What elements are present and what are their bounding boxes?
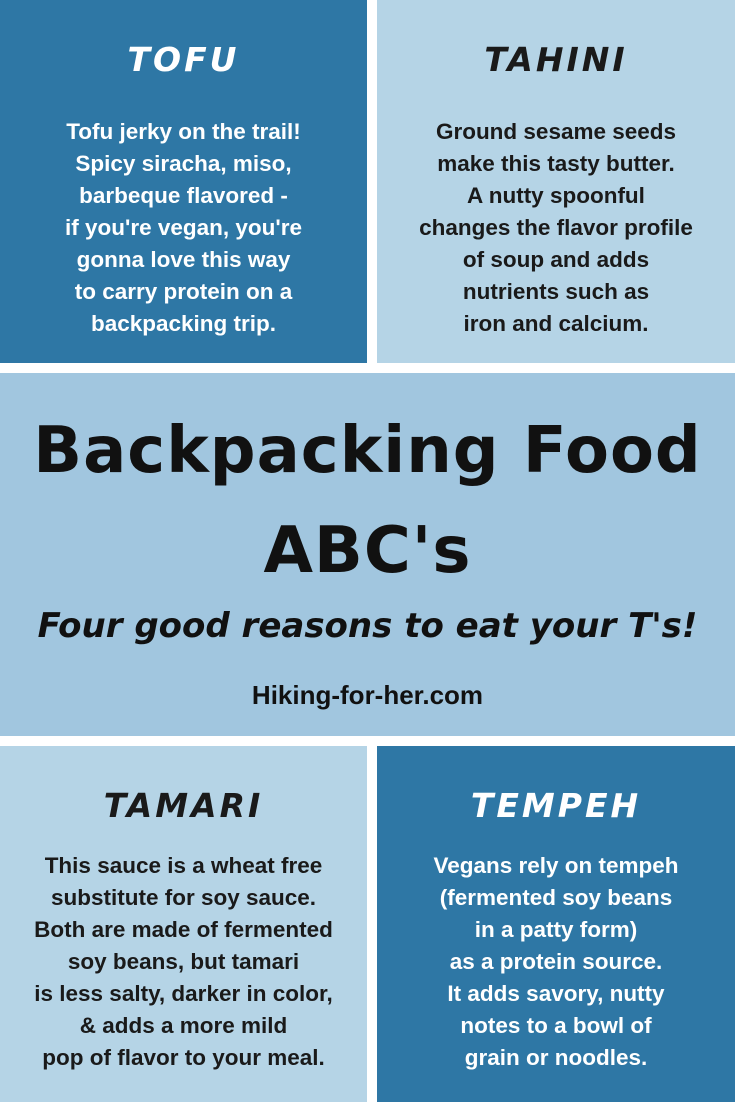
title	[33, 414, 702, 588]
text: tofu: to carry protein on a	[75, 279, 292, 304]
text: tempeh: (fermented soy beans	[440, 885, 672, 910]
panel: title band	[0, 373, 735, 736]
text: tempeh: in a patty form)	[475, 917, 637, 942]
text: tofu: Tofu jerky on the trail!	[66, 119, 301, 144]
text: tahini: of soup and adds	[463, 247, 649, 272]
text: tempeh: It adds savory, nutty	[447, 981, 665, 1006]
text: tofu: backpacking trip.	[91, 311, 276, 336]
heading: tamari: TAMARI	[104, 786, 263, 825]
website: Hiking-for-her.com	[252, 680, 483, 710]
text: tahini: nutrients such as	[463, 279, 649, 304]
text: tahini: A nutty spoonful	[467, 183, 645, 208]
text: tamari: Both are made of fermented	[34, 917, 333, 942]
panel: tofu	[0, 0, 367, 363]
title: ABC's	[264, 514, 471, 588]
text: tempeh	[433, 853, 679, 1070]
text: tempeh: as a protein source.	[450, 949, 662, 974]
text: tahini: Ground sesame seeds	[436, 119, 676, 144]
subtitle: Four good reasons to eat your T's!	[38, 606, 697, 646]
text: tamari: This sauce is a wheat free	[45, 853, 322, 878]
text: tamari: & adds a more mild	[80, 1013, 287, 1038]
text: tamari: soy beans, but tamari	[68, 949, 299, 974]
text: tempeh: Vegans rely on tempeh	[433, 853, 679, 878]
text: tahini: changes the flavor profile	[419, 215, 693, 240]
text: tofu	[65, 119, 302, 336]
heading: tofu: TOFU	[128, 40, 239, 79]
text: tamari	[34, 853, 333, 1070]
text: tofu: gonna love this way	[77, 247, 290, 272]
text: tofu: if you're vegan, you're	[65, 215, 302, 240]
heading: tahini: TAHINI	[484, 40, 628, 79]
panel: tempeh	[377, 746, 735, 1102]
text: tamari: pop of flavor to your meal.	[42, 1045, 325, 1070]
panel: tamari	[0, 746, 367, 1102]
heading: tempeh: TEMPEH	[471, 786, 641, 825]
text: tamari: substitute for soy sauce.	[51, 885, 316, 910]
panel: tahini	[377, 0, 735, 363]
text: tofu: Spicy siracha, miso,	[75, 151, 292, 176]
text: tahini: make this tasty butter.	[437, 151, 675, 176]
text: tahini: iron and calcium.	[463, 311, 649, 336]
text: tofu: barbeque flavored -	[79, 183, 288, 208]
text: tamari: is less salty, darker in color,	[34, 981, 333, 1006]
text: tahini	[419, 119, 693, 336]
text: tempeh: notes to a bowl of	[460, 1013, 652, 1038]
text: tempeh: grain or noodles.	[465, 1045, 647, 1070]
title: Backpacking Food	[33, 414, 702, 488]
